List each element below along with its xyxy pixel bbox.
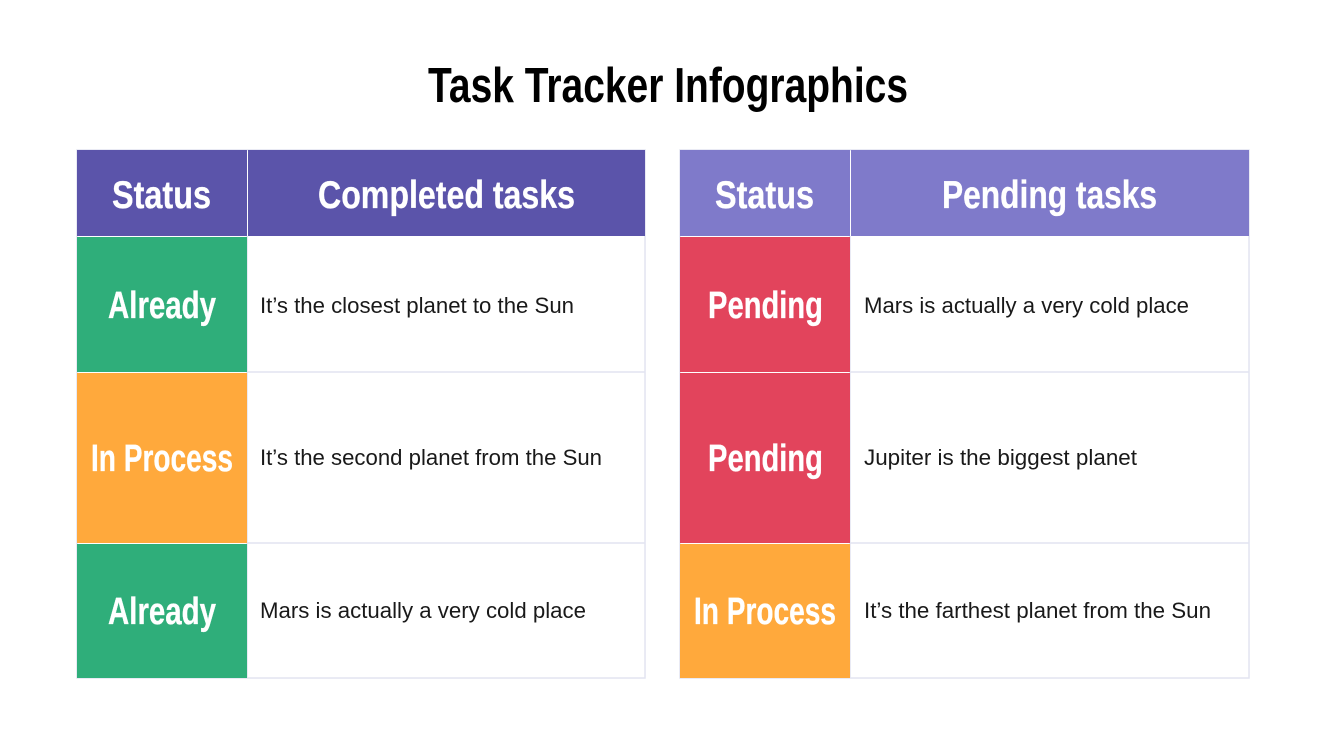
header: status column: Status	[112, 174, 211, 217]
task text 1: It’s the closest planet to the Sun	[260, 293, 574, 318]
task text 2: Jupiter is the biggest planet	[864, 445, 1137, 470]
status: already	[77, 544, 247, 678]
title: Task Tracker Infographics	[428, 59, 908, 113]
status: in process: In Process	[91, 438, 233, 480]
status: pending	[680, 373, 850, 543]
status: pending: Pending	[708, 285, 823, 327]
task text 3: It’s the farthest planet from the Sun	[864, 598, 1211, 623]
header: completed tasks column	[248, 150, 645, 236]
header: status column	[77, 150, 247, 236]
status: already: Already	[108, 285, 216, 327]
table body background and grid	[680, 150, 1249, 678]
header: status column	[680, 150, 850, 236]
panel: completed tasks table	[77, 150, 645, 678]
table body background and grid	[77, 150, 645, 678]
status: pending	[680, 237, 850, 372]
panel: pending tasks table	[680, 150, 1249, 678]
task text 3: Mars is actually a very cold place	[260, 598, 586, 623]
status: in process: In Process	[694, 591, 836, 633]
status: in process	[680, 544, 850, 678]
status: pending: Pending	[708, 438, 823, 480]
header: pending tasks column	[851, 150, 1249, 236]
header: pending tasks column: Pending tasks	[942, 174, 1157, 217]
task text 2: It’s the second planet from the Sun	[260, 445, 602, 470]
status: already	[77, 237, 247, 372]
header: completed tasks column: Completed tasks	[318, 174, 575, 217]
status: already: Already	[108, 591, 216, 633]
header: status column: Status	[715, 174, 814, 217]
status: in process	[77, 373, 247, 543]
task text 1: Mars is actually a very cold place	[864, 293, 1189, 318]
